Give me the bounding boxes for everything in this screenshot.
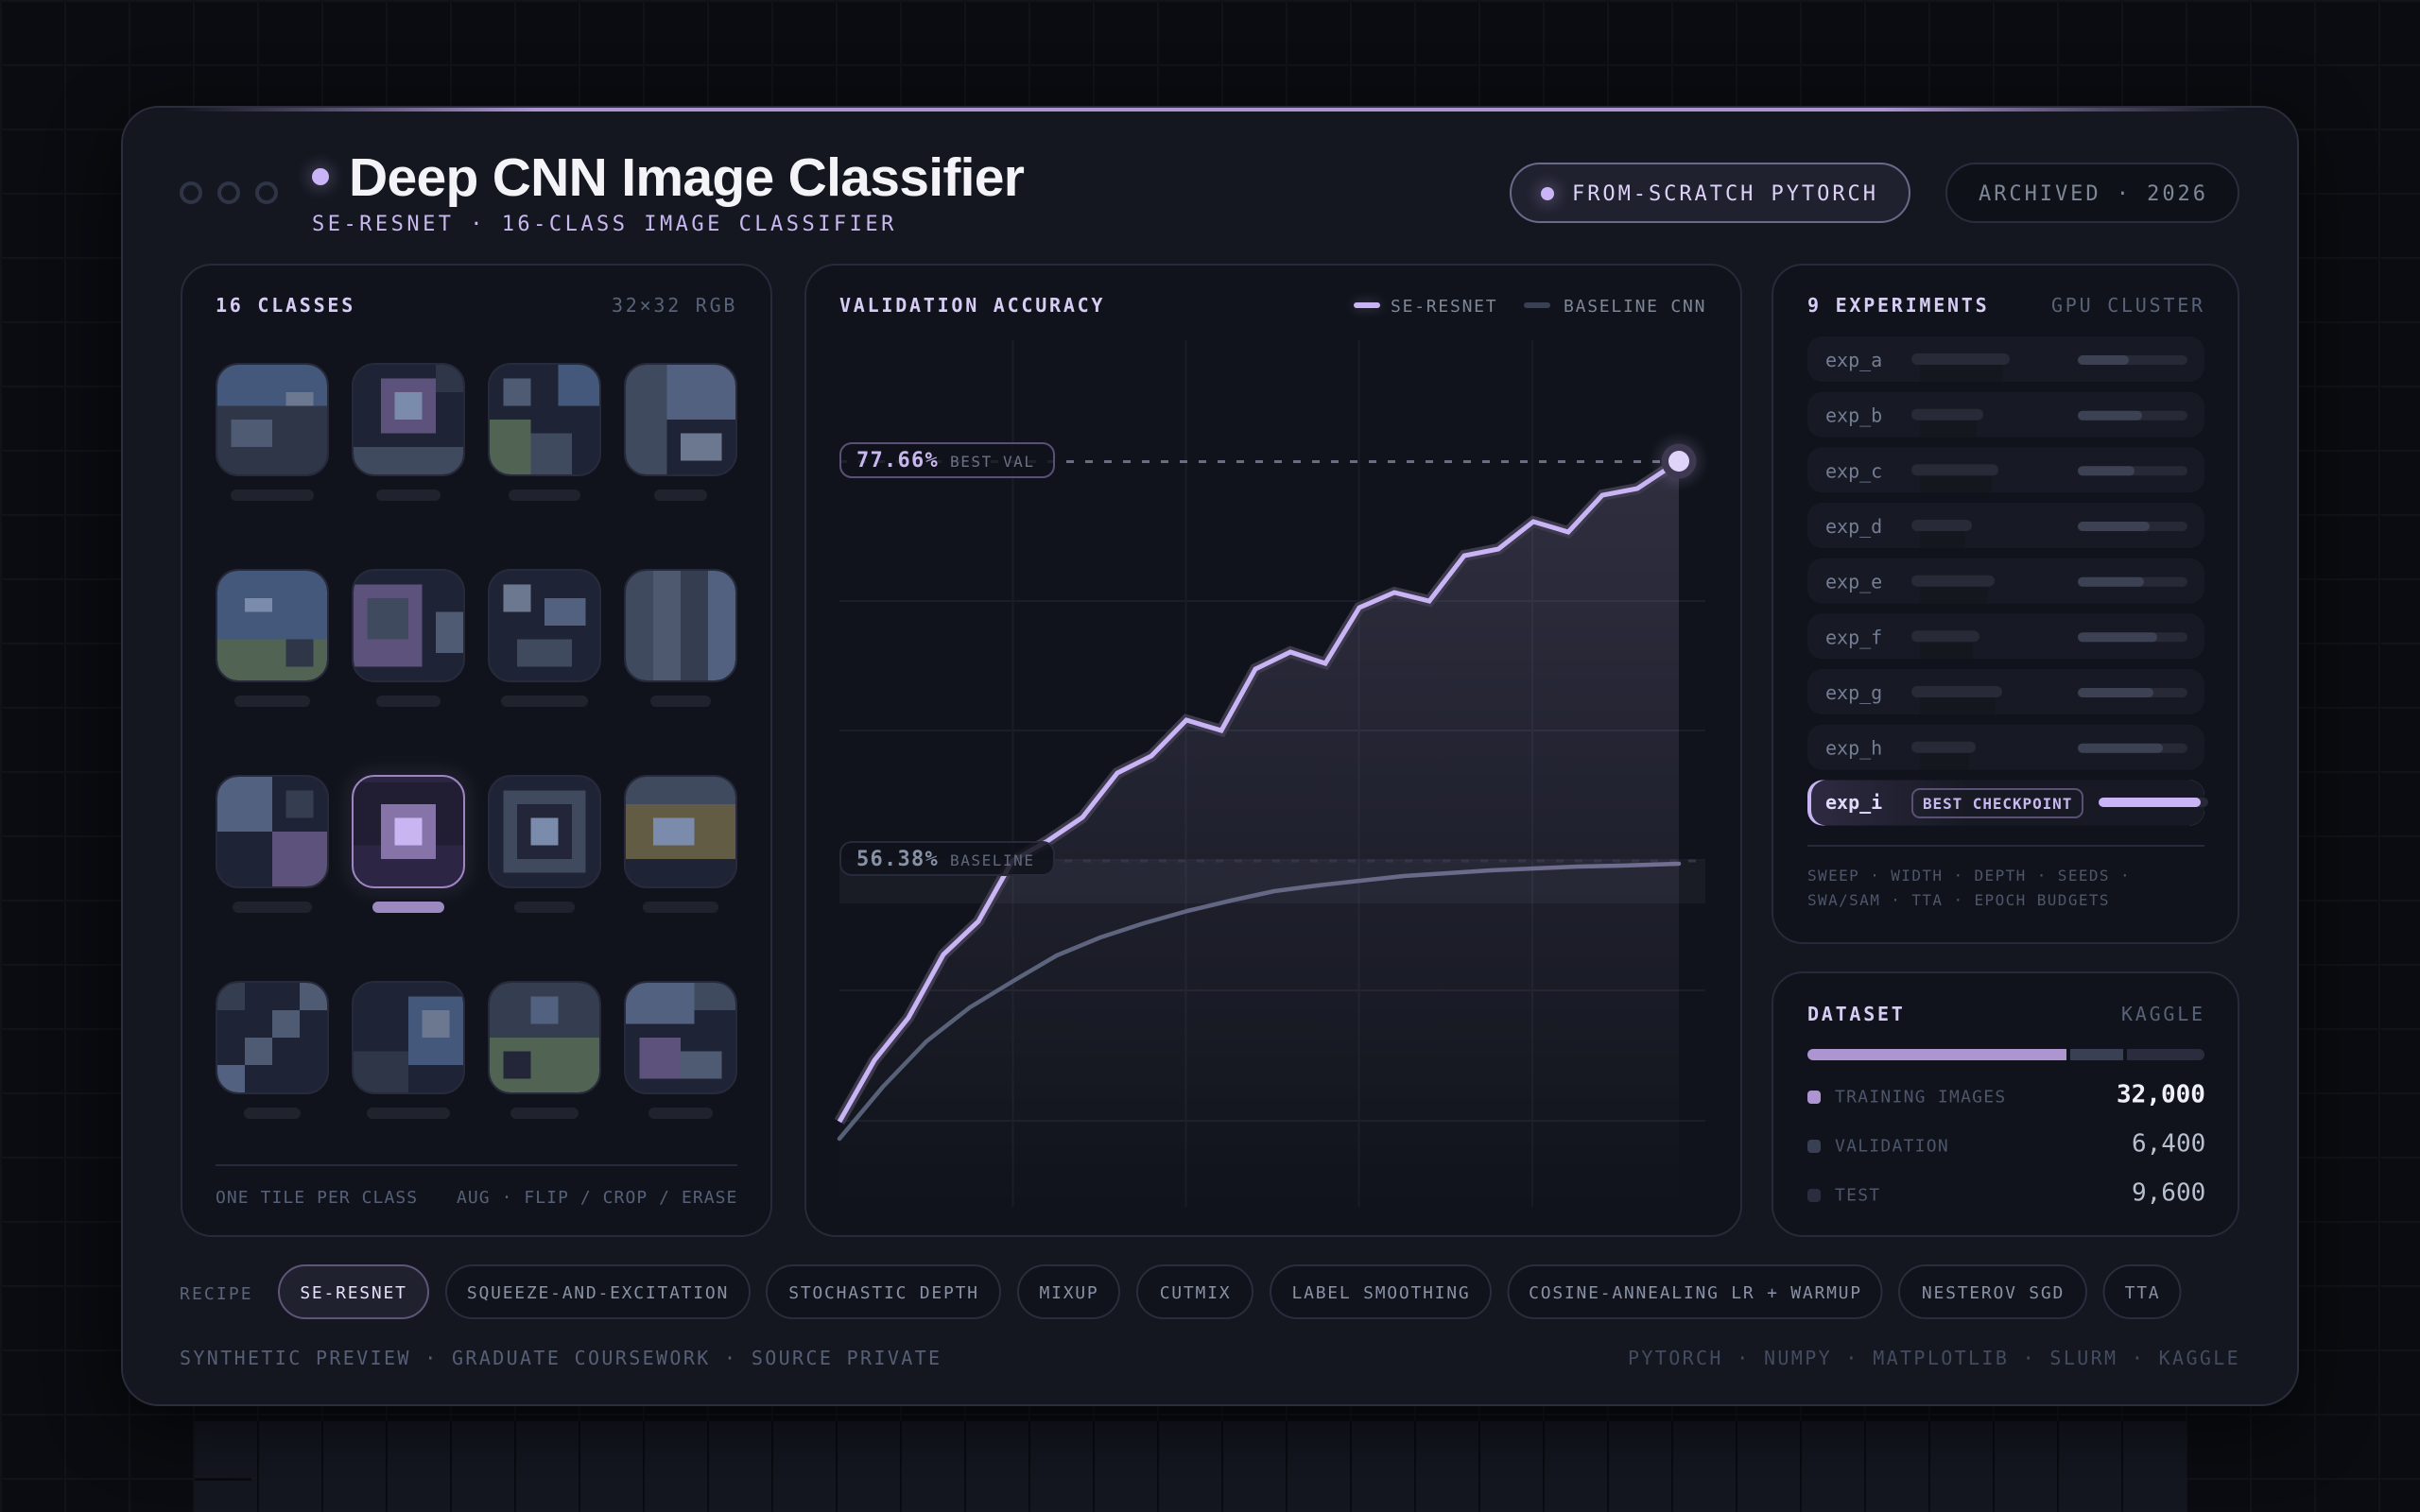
row exp_f: exp_f [1825, 626, 1882, 648]
tile 10: highlighted class [348, 771, 469, 913]
chip: mixup: MIXUP [1040, 1283, 1098, 1303]
tile 15 [489, 982, 600, 1119]
row exp_c: exp_c [1825, 459, 1882, 482]
tile 8 [625, 570, 736, 707]
stat: validation [1807, 1130, 2205, 1159]
chip: label smoothing [1270, 1265, 1491, 1318]
tile size note: 32×32 RGB [612, 294, 737, 317]
stat: test: TEST [1835, 1185, 1880, 1206]
badge: archived [1946, 163, 2238, 222]
heading: experiments: 9 EXPERIMENTS [1807, 294, 1989, 317]
subtitle: SE-RESNET · 16-CLASS IMAGE CLASSIFIER [312, 213, 897, 236]
chip: squeeze-and-excitation [446, 1265, 750, 1318]
stat: training images [1807, 1081, 2205, 1109]
chip: nesterov sgd [1899, 1265, 2086, 1318]
chip: se-resnet [279, 1265, 428, 1318]
panel: dataset [1772, 972, 2238, 1236]
baseline band [839, 861, 1705, 903]
heading: validation accuracy: VALIDATION ACCURACY [839, 294, 1105, 317]
chip: stochastic depth [767, 1265, 1000, 1318]
baseline guide [1064, 860, 1705, 862]
panel: 16 classes [182, 265, 771, 1236]
legend [1354, 297, 1706, 317]
tile 12 [625, 776, 736, 913]
frame card [122, 107, 2298, 1405]
source note: KAGGLE [2121, 1003, 2205, 1025]
chip: stochastic depth: STOCHASTIC DEPTH [788, 1283, 979, 1303]
row exp_d [1807, 503, 2204, 548]
callout: baseline: 56.38% [856, 848, 939, 871]
tile 4 [625, 364, 736, 501]
tile 5 [216, 570, 328, 707]
chip: mixup [1018, 1265, 1119, 1318]
row exp_c [1807, 447, 2204, 492]
panel: validation accuracy [805, 265, 1741, 1236]
cluster note: GPU CLUSTER [2051, 294, 2205, 317]
chip: cutmix: CUTMIX [1160, 1283, 1231, 1303]
footnote: augmentations: AUG · FLIP / CROP / ERASE [457, 1188, 737, 1208]
chip: cosine-annealing: COSINE-ANNEALING LR + WARMUP [1529, 1283, 1862, 1303]
row exp_i: best checkpoint [1807, 781, 2208, 826]
bottom tile strip [195, 1421, 2187, 1512]
chip: label smoothing: LABEL SMOOTHING [1292, 1283, 1470, 1303]
callout: baseline [840, 842, 1054, 875]
row exp_h [1807, 725, 2204, 770]
footer left: SYNTHETIC PREVIEW · GRADUATE COURSEWORK · SOURCE PRIVATE [180, 1347, 942, 1369]
tile 1 [216, 364, 328, 501]
top accent line [159, 108, 2261, 112]
split bar [1807, 1049, 2204, 1060]
chip: cutmix [1137, 1265, 1253, 1318]
chip: se-resnet: SE-RESNET [300, 1283, 407, 1303]
callout: baseline: BASELINE [950, 851, 1035, 869]
stat: training images: 32,000 [2117, 1081, 2205, 1109]
row exp_i: best checkpoint: exp_i [1825, 791, 1882, 814]
badge: from-scratch pytorch [1511, 163, 1910, 222]
chip: squeeze-and-excitation: SQUEEZE-AND-EXCITATION [467, 1283, 729, 1303]
title: Deep CNN Image Classifier [349, 147, 1025, 208]
stat: test [1807, 1179, 2205, 1208]
callout: best val: BEST VAL [950, 453, 1035, 471]
chip: cosine-annealing [1509, 1265, 1881, 1318]
chip: tta [2104, 1265, 2180, 1318]
row exp_g [1807, 669, 2204, 714]
tile 6 [353, 570, 464, 707]
best point marker [1656, 438, 1702, 484]
heading: dataset: DATASET [1807, 1003, 1906, 1025]
accuracy area [839, 461, 1679, 1207]
line chart [839, 340, 1705, 1207]
row exp_e: exp_e [1825, 571, 1882, 593]
tile 11 [489, 776, 600, 913]
badge: best checkpoint: BEST CHECKPOINT [1923, 795, 2072, 813]
best value guide [839, 460, 1679, 463]
row exp_a [1807, 336, 2204, 382]
stat: test: 9,600 [2132, 1179, 2205, 1208]
footer right: PYTORCH · NUMPY · MATPLOTLIB · SLURM · KAGGLE [1628, 1347, 2240, 1369]
window dots [182, 183, 276, 202]
tile 9 [216, 776, 328, 913]
badge: from-scratch pytorch: FROM-SCRATCH PYTORCH [1572, 182, 1878, 206]
callout: best val [840, 443, 1054, 477]
stat: validation: 6,400 [2132, 1130, 2205, 1159]
row exp_h: exp_h [1825, 737, 1882, 760]
tile 14 [353, 982, 464, 1119]
chip: nesterov sgd: NESTEROV SGD [1922, 1283, 2065, 1303]
sweep note: SWEEP · WIDTH · DEPTH · SEEDS · [1807, 867, 2131, 885]
recipe chips [279, 1265, 2180, 1318]
stat: training images: TRAINING IMAGES [1835, 1087, 2006, 1108]
tile 7 [489, 570, 600, 707]
badge: best checkpoint [1912, 789, 2083, 817]
callout: best val: 77.66% [856, 449, 939, 472]
baseline curve [839, 864, 1679, 1139]
row exp_a: exp_a [1825, 349, 1882, 371]
sweep note: SWA/SAM · TTA · EPOCH BUDGETS [1807, 891, 2110, 909]
icon: title status dot [305, 162, 336, 192]
tile 3 [489, 364, 600, 501]
tile 13 [216, 982, 328, 1119]
tile 16 [625, 982, 736, 1119]
row exp_b [1807, 392, 2204, 438]
recipe label: RECIPE [180, 1284, 253, 1304]
se-resnet curve [839, 461, 1679, 1122]
row exp_f [1807, 613, 2204, 659]
chip: tta: TTA [2125, 1283, 2160, 1303]
legend: BASELINE CNN [1564, 297, 1706, 317]
footnote: one tile per class: ONE TILE PER CLASS [216, 1188, 418, 1208]
panel: experiments [1772, 265, 2238, 943]
row exp_g: exp_g [1825, 681, 1882, 704]
sweep note [1807, 867, 2131, 909]
tile 2 [353, 364, 464, 501]
badge: archived: ARCHIVED · 2026 [1979, 182, 2208, 206]
row exp_b: exp_b [1825, 404, 1882, 427]
frame shadow [121, 125, 2299, 1425]
row exp_d: exp_d [1825, 515, 1882, 538]
stat: validation: VALIDATION [1835, 1136, 1949, 1157]
row exp_e [1807, 558, 2204, 604]
legend: SE-RESNET [1391, 297, 1497, 317]
heading: 16 classes: 16 CLASSES [216, 294, 355, 317]
